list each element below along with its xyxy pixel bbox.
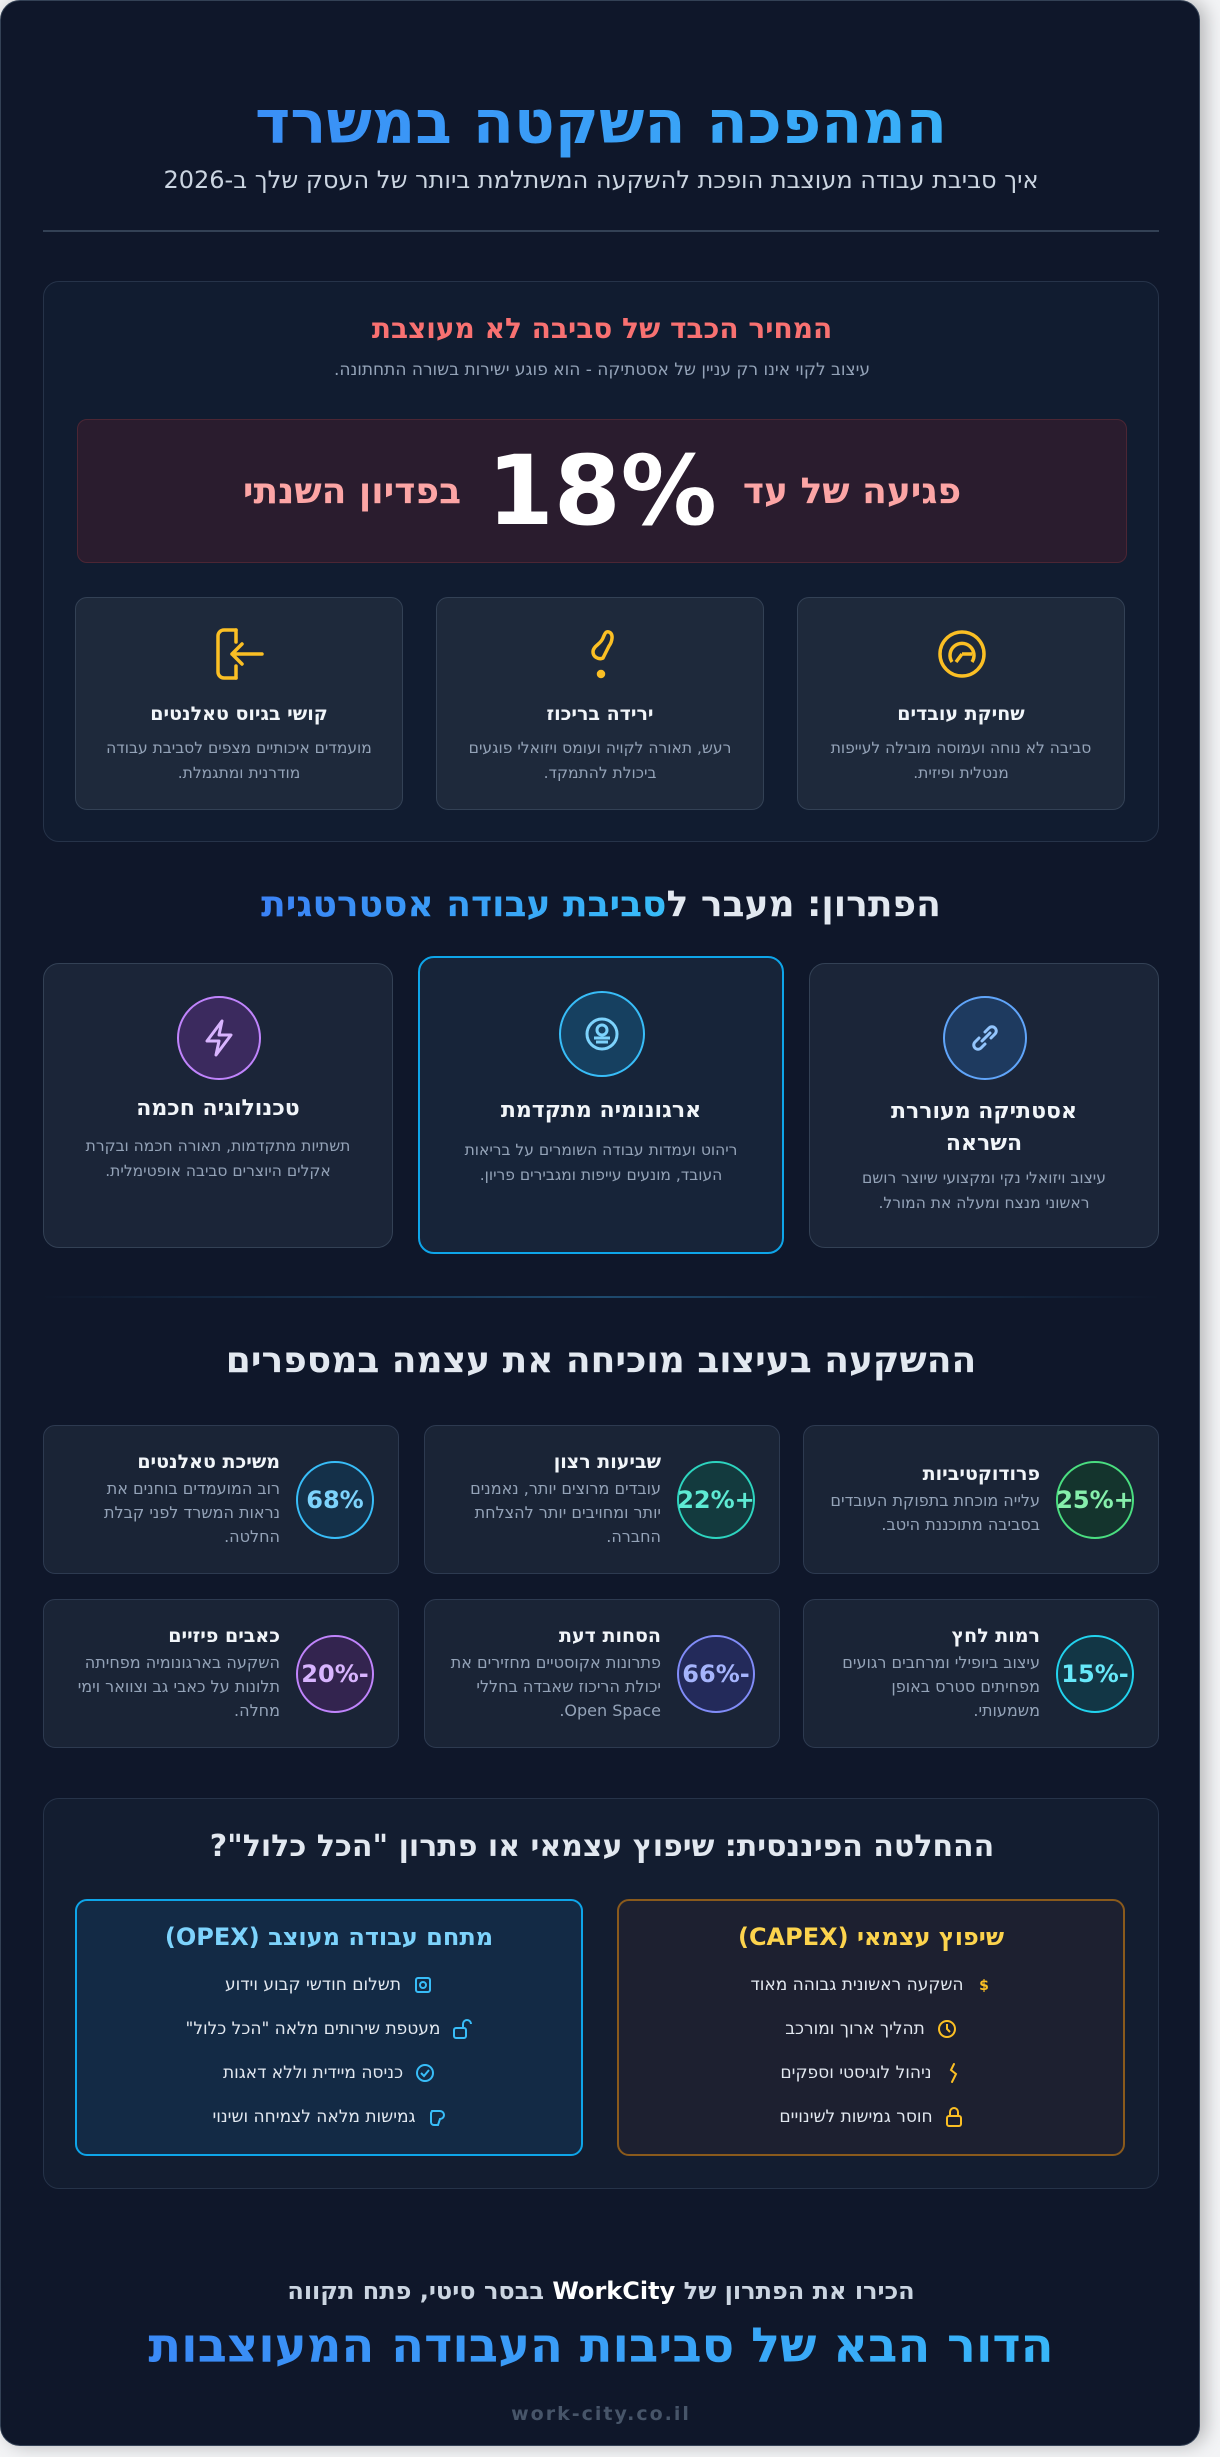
item: high investment: $: [979, 1978, 988, 1994]
banner: 18% revenue impact: פגיעה של עד: [743, 470, 961, 512]
banner: 18% revenue impact: [77, 419, 1127, 563]
item: all inclusive: מעטפת שירותים מלאה "הכל כלול": [186, 2019, 440, 2039]
stat: distractions: הסחות דעת: [559, 1624, 661, 1646]
stat: stress: 15%-: [1061, 1660, 1129, 1688]
item: immediate entry: כניסה מיידית וללא דאגות: [223, 2063, 403, 2083]
card: smart technology: [43, 963, 393, 1248]
stat: productivity: 25%+: [1056, 1486, 1134, 1514]
stat: physical pain: כאבים פיזיים: [168, 1624, 280, 1646]
card: focus drop: [436, 597, 764, 810]
box: OPEX: מתחם עבודה מעוצב (OPEX): [165, 1923, 493, 1951]
icon: link circle: [943, 996, 1027, 1080]
stat: productivity: עלייה מוכחת בתפוקת העובדים בסביבה מתוכננת היטב.: [830, 1490, 1040, 1534]
heading: solution: הפתרון: מעבר לסביבת עבודה אסטרטגית: [261, 884, 941, 925]
stat: physical pain: 20%-: [301, 1660, 369, 1688]
title: המהפכה השקטה במשרד: [255, 88, 947, 158]
card: focus drop: ירידה בריכוז: [546, 703, 653, 725]
title: [1, 83, 1201, 163]
stat: physical pain: השקעה בארגונומיה מפחיתה תלונות על כאבי גב וצוואר וימי מחלה.: [78, 1652, 280, 1720]
stat: stress: רמות לחץ: [952, 1624, 1040, 1646]
panel heading: המחיר הכבד של סביבה לא מעוצבת: [372, 312, 832, 345]
box: CAPEX: שיפוץ עצמאי (CAPEX): [738, 1923, 1004, 1951]
card: inspiring aesthetics: אסטתיקה מעוררת: [891, 1099, 1077, 1124]
stat: physical pain: [43, 1599, 399, 1748]
icon: lightning circle: [177, 996, 261, 1080]
item: logistics: ניהול לוגיסטי וספקים: [780, 2063, 932, 2083]
stat: talent attraction: [43, 1425, 399, 1574]
stat: productivity: פרודוקטיביות: [923, 1462, 1040, 1484]
box: CAPEX: [617, 1899, 1125, 2156]
card: talent recruitment: מועמדים איכותיים מצפים לסביבת עבודה מודרנית ומתגמלת.: [106, 739, 372, 782]
card: smart technology: תשתיות מתקדמות, תאורה חכמה ובקרת אקלים היוצרים סביבה אופטימלית.: [86, 1137, 350, 1180]
stat: satisfaction: [424, 1425, 780, 1574]
footer headline: הדור הבא של סביבות העבודה המעוצבות: [148, 2318, 1054, 2374]
stat: talent attraction: 68%: [306, 1486, 364, 1514]
card: advanced ergonomics (highlighted): ארגונומיה מתקדמת: [501, 1098, 701, 1123]
card: talent recruitment: קושי בגיוס טאלנטים: [150, 703, 328, 725]
card: talent recruitment: [75, 597, 403, 810]
card: inspiring aesthetics: השראה: [946, 1131, 1022, 1156]
stat: stress: [803, 1599, 1159, 1748]
item: high investment: השקעה ראשונית גבוהה מאוד: [750, 1975, 964, 1995]
item: no flexibility: חוסר גמישות לשינויים: [779, 2107, 933, 2127]
heading: numbers: ההשקעה בעיצוב מוכיחה את עצמה במספרים: [226, 1340, 976, 1381]
stat: stress: עיצוב ביופילי ומרחבים רגועים מפחיתים סטרס באופן משמעותי.: [842, 1652, 1040, 1720]
card: inspiring aesthetics: עיצוב ויזואלי נקי ומקצועי שיוצר רושם ראשוני מנצח ומעלה את המורל.: [862, 1169, 1106, 1212]
card: inspiring aesthetics: [809, 963, 1159, 1248]
footer headline: [1, 2313, 1201, 2379]
icon: distraction: [591, 630, 614, 678]
stat: talent attraction: רוב המועמדים בוחנים את נראות המשרד לפני קבלת החלטה.: [104, 1478, 280, 1546]
banner: 18% revenue impact: בפדיון השנתי: [243, 470, 461, 512]
icon: ergonomics circle: [559, 991, 645, 1077]
panel: financial decision: [43, 1798, 1159, 2189]
card: employee burnout: שחיקת עובדים: [897, 703, 1025, 725]
stat: distractions: 66%-: [682, 1660, 750, 1688]
item: fixed payment: תשלום חודשי קבוע וידוע: [225, 1975, 401, 1995]
stat: productivity: [803, 1425, 1159, 1574]
banner: 18% revenue impact: 18%: [487, 435, 717, 547]
item: long process: תהליך ארוך ומורכב: [785, 2019, 925, 2039]
icon: enter door: [216, 628, 264, 680]
subtitle: איך סביבת עבודה מעוצבת הופכת להשקעה המשתלמת ביותר של העסק שלך ב-2026: [163, 166, 1039, 194]
footer intro: הכירו את הפתרון של WorkCity בבסר סיטי, פתח תקווה: [287, 2277, 915, 2305]
card: employee burnout: סביבה לא נוחה ועמוסה מובילה לעייפות מנטלית ופיזית.: [831, 739, 1091, 782]
stat: distractions: [424, 1599, 780, 1748]
item: flexibility: גמישות מלאה לצמיחה ושינוי: [212, 2107, 416, 2127]
card: advanced ergonomics (highlighted): ריהוט ועמדות עבודה השומרים על בריאות העובד, מונעים עייפות ומגבירים פריון.: [465, 1141, 737, 1184]
box: OPEX: [75, 1899, 583, 2156]
stat: satisfaction: שביעות רצון: [554, 1450, 661, 1472]
panel: cost of poor design: [43, 281, 1159, 842]
footer url: work-city.co.il: [511, 2403, 691, 2425]
stat: talent attraction: משיכת טאלנטים: [137, 1450, 280, 1472]
card: smart technology: טכנולוגיה חכמה: [136, 1096, 300, 1121]
icon: gauge: [938, 630, 986, 678]
card: advanced ergonomics (highlighted): [418, 956, 784, 1254]
panel heading: ההחלטה הפיננסית: שיפוץ עצמאי או פתרון "הכל כלול"?: [210, 1829, 994, 1864]
card: focus drop: רעש, תאורה לקויה ועומס ויזואלי פוגעים ביכולת להתמקד.: [469, 739, 731, 782]
stat: satisfaction: עובדים מרוצים יותר, נאמנים יותר ומחויבים יותר להצלחת החברה.: [470, 1478, 661, 1546]
stat: satisfaction: 22%+: [677, 1486, 755, 1514]
stat: distractions: פתרונות אקוסטיים מחזירים את יכולת הריכוז שאבדה בחללי Open Space.: [451, 1652, 661, 1720]
panel subtext: עיצוב לקוי אינו רק עניין של אסטתיקה - הוא פוגע ישירות בשורה התחתונה.: [334, 360, 870, 380]
card: employee burnout: [797, 597, 1125, 810]
